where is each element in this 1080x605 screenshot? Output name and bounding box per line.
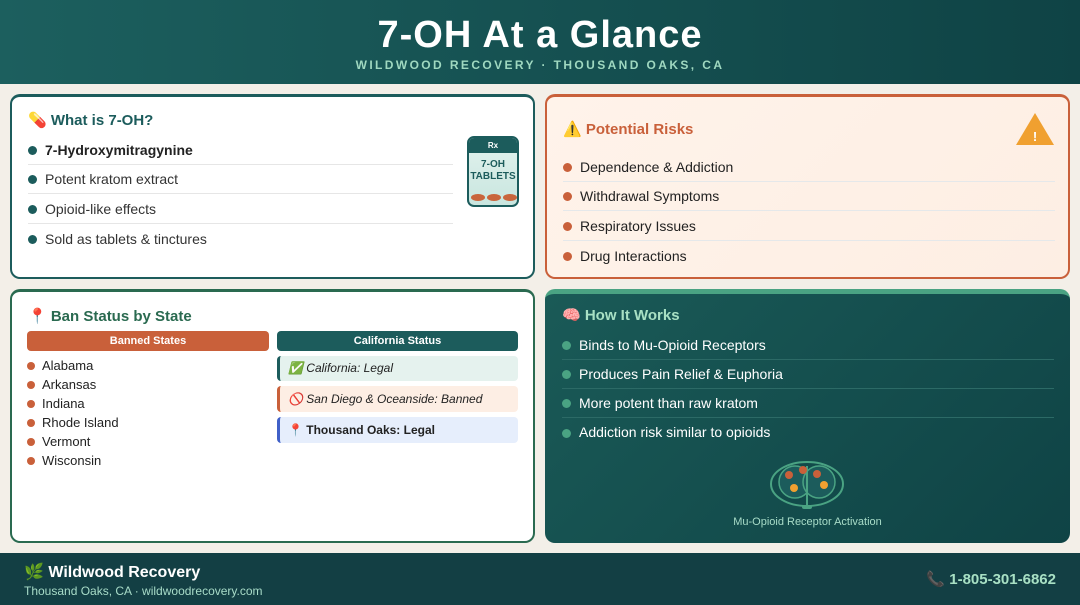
heading: 🧠 How It Works <box>562 307 680 324</box>
list: Binds to Mu-Opioid Receptors <box>579 337 766 353</box>
banned states column: Rhode Island <box>42 415 119 430</box>
caption: Mu-Opioid Receptor Activation <box>733 516 882 528</box>
phone: 📞 1-805-301-6862 <box>926 571 1056 588</box>
list: Potent kratom extract <box>45 171 178 187</box>
panel: potential risks <box>545 94 1070 279</box>
list: Withdrawal Symptoms <box>580 188 719 204</box>
banned states column: Vermont <box>42 434 90 449</box>
heading: 💊 What is 7-OH? <box>28 112 153 129</box>
icon: tablets bottle: TABLETS <box>470 171 516 182</box>
banned states column: Arkansas <box>42 377 96 392</box>
list <box>562 337 1054 440</box>
banned states column: Indiana <box>42 396 85 411</box>
list: Dependence & Addiction <box>580 159 733 175</box>
panel: how it works <box>545 289 1070 543</box>
header: 7-OH At a Glance <box>377 14 702 56</box>
brand: Thousand Oaks, CA · wildwoodrecovery.com <box>24 584 263 598</box>
banned states column: Banned States <box>110 335 186 347</box>
icon: tablets bottle <box>467 136 519 207</box>
list: Opioid-like effects <box>45 201 156 217</box>
heading: ⚠️ Potential Risks <box>563 121 693 138</box>
california status column: ✅ California: Legal <box>288 361 393 375</box>
icon: warning triangle <box>1016 113 1054 145</box>
california status column <box>277 331 518 443</box>
banned states column <box>27 331 269 468</box>
brand: 🌿 Wildwood Recovery <box>24 564 200 581</box>
list: More potent than raw kratom <box>579 395 758 411</box>
icon: receptor diagram <box>770 461 844 509</box>
brand <box>24 562 263 598</box>
list: Respiratory Issues <box>580 218 696 234</box>
list: 7-Hydroxymitragynine <box>45 142 193 158</box>
banned states column: Alabama <box>42 358 93 373</box>
california status column: California Status <box>354 335 441 347</box>
list: Drug Interactions <box>580 248 687 264</box>
list: Produces Pain Relief & Euphoria <box>579 366 783 382</box>
list: Sold as tablets & tinctures <box>45 231 207 247</box>
heading: 📍 Ban Status by State <box>28 308 192 325</box>
header <box>0 0 1080 84</box>
icon: tablets bottle: Rx <box>488 141 498 150</box>
list: Addiction risk similar to opioids <box>579 424 770 440</box>
panel: ban status <box>10 289 535 543</box>
banned states column: Wisconsin <box>42 453 101 468</box>
list <box>28 142 453 247</box>
footer <box>0 553 1080 605</box>
icon: tablets bottle: 7-OH <box>481 159 505 170</box>
california status column: 📍 Thousand Oaks: Legal <box>288 423 435 437</box>
icon: warning triangle: ! <box>1033 129 1037 144</box>
california status column: 🚫 San Diego & Oceanside: Banned <box>288 392 482 406</box>
list <box>563 159 1055 264</box>
panel: what is 7-OH <box>10 94 535 279</box>
header: WILDWOOD RECOVERY · THOUSAND OAKS, CA <box>356 58 724 72</box>
